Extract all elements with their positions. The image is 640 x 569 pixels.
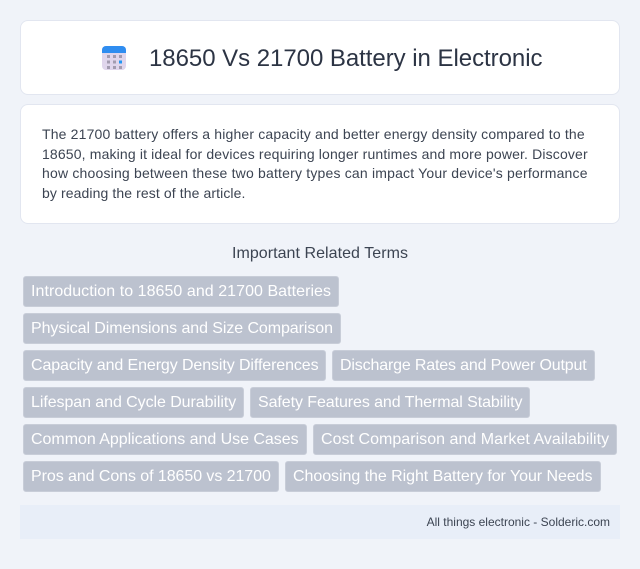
intro paragraph: by reading the rest of the article. bbox=[42, 184, 246, 200]
tag: Cost Comparison and Market Availability bbox=[321, 431, 609, 448]
intro text card bbox=[20, 104, 620, 224]
tag bbox=[23, 276, 339, 307]
tag bbox=[23, 387, 244, 418]
footer credit: All things electronic - Solderic.com bbox=[427, 515, 610, 529]
tag: Capacity and Energy Density Differences bbox=[31, 357, 319, 374]
intro paragraph bbox=[42, 126, 588, 201]
tag bbox=[23, 424, 307, 455]
tag: Pros and Cons of 18650 vs 21700 bbox=[31, 468, 271, 485]
tag: Common Applications and Use Cases bbox=[31, 431, 299, 448]
intro paragraph: 18650, making it ideal for devices requiring longer runtimes and more power. Discover bbox=[42, 146, 588, 162]
tag bbox=[23, 350, 326, 381]
tag bbox=[285, 461, 601, 492]
intro paragraph: how choosing between these two battery types can impact Your device's performance bbox=[42, 165, 588, 181]
tag: Physical Dimensions and Size Comparison bbox=[31, 320, 333, 337]
title: 18650 Vs 21700 Battery in Electronic bbox=[149, 45, 542, 72]
footer bar bbox=[20, 505, 620, 539]
section heading: Important Related Terms bbox=[232, 245, 408, 262]
tag: Discharge Rates and Power Output bbox=[340, 357, 587, 374]
header card bbox=[20, 20, 620, 95]
tag bbox=[23, 461, 279, 492]
tag bbox=[332, 350, 595, 381]
tags list bbox=[23, 276, 617, 492]
tag: Lifespan and Cycle Durability bbox=[31, 394, 236, 411]
tag: Introduction to 18650 and 21700 Batteries bbox=[31, 283, 331, 300]
tag bbox=[250, 387, 530, 418]
tag bbox=[313, 424, 617, 455]
tag: Safety Features and Thermal Stability bbox=[258, 394, 522, 411]
tag: Choosing the Right Battery for Your Needs bbox=[293, 468, 592, 485]
tag bbox=[23, 313, 341, 344]
intro paragraph: The 21700 battery offers a higher capacity and better energy density compared to the bbox=[42, 126, 585, 142]
icon: calendar bbox=[102, 46, 126, 70]
